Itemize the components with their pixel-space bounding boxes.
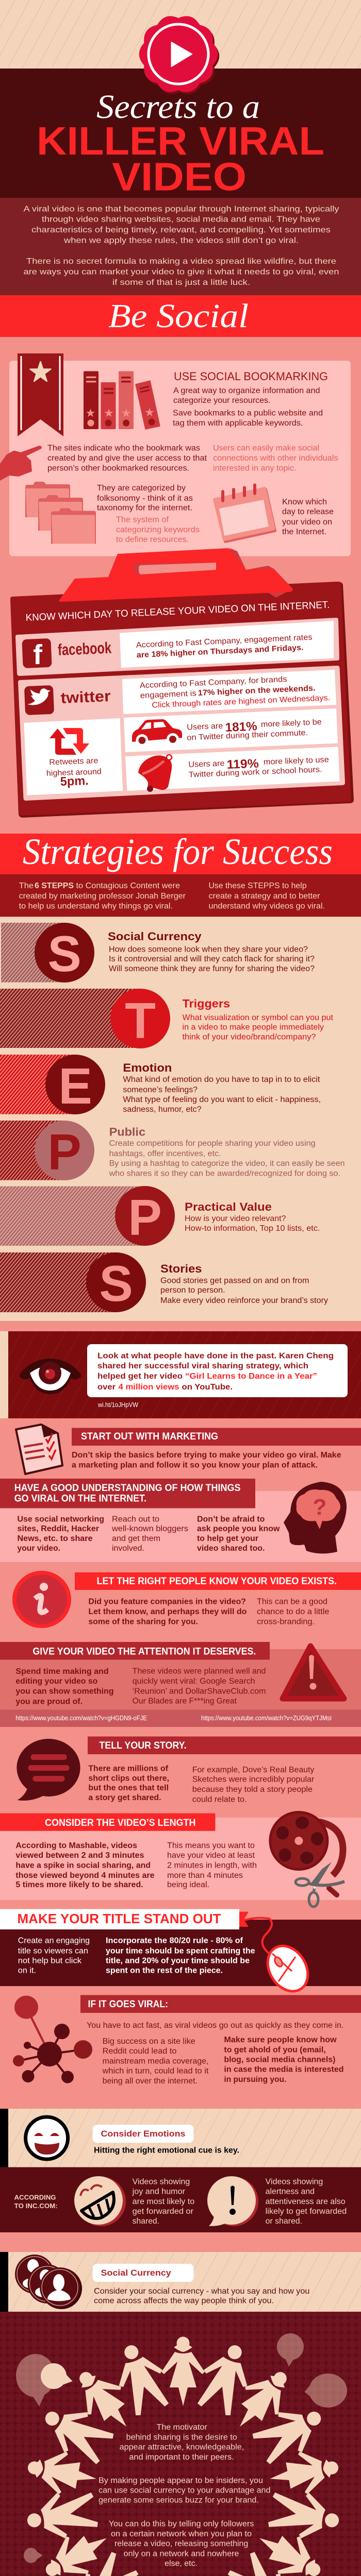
step: Social Currency: How does someone look when they share your video? [109, 945, 308, 954]
text: callout: over [97, 1383, 116, 1392]
text: twitter engagement [139, 675, 330, 710]
text: tell your story: Sketches were incredibly popular [192, 1775, 314, 1784]
step: Social Currency: Will someone think they are funny for sharing the video? [109, 964, 315, 973]
text: callout [97, 1351, 334, 1392]
text: work or school stat: 119% [226, 757, 259, 772]
panel: understanding how things go viral: GO VIRAL ON THE INTERNET. [14, 1494, 146, 1504]
icon: pointing hand [0, 446, 42, 481]
text: tell your story [88, 1764, 315, 1804]
banner: start out with marketing: START OUT WITH MARKETING [81, 1431, 218, 1442]
panel: STEPPS intro: created by marketing professor Jonah Berger [19, 892, 186, 901]
label: twitter: twitter [60, 688, 111, 707]
text: length body: have your video at least [167, 1851, 255, 1860]
text: system of categorizing: The system of [116, 515, 169, 524]
icon: clipboard handle [59, 548, 293, 602]
step: Triggers: in a video to make people immediately [183, 1023, 324, 1031]
text: if it goes viral: in pursuing you. [224, 2075, 286, 2084]
text: tell your story: because they told a story people [192, 1785, 313, 1794]
panel: give your video attention: GIVE YOUR VIDEO THE ATTENTION IT DESERVES. [32, 1646, 256, 1657]
text: commute stat: Users are [187, 722, 223, 732]
icon: facebook [22, 638, 52, 670]
text: facebook stats: According to Fast Company, engagement rates [136, 633, 313, 650]
text: length body: have a spike in social sharing, and [15, 1861, 151, 1870]
text: alertness [266, 2178, 347, 2226]
panel: be social background [0, 337, 361, 834]
text: folksonomy: They are categorized by [97, 484, 186, 493]
text: commute stat: on Twitter during their commute. [187, 728, 308, 742]
text: motivator: else, etc. [165, 2559, 198, 2568]
text: commute stat: more likely to be [260, 718, 322, 729]
text: companies: cross-branding. [257, 1617, 315, 1626]
text: title body: not help but click [18, 1957, 81, 1965]
panel: social currency: come across affects the way people think of you. [94, 2296, 274, 2305]
step: Public [0, 1121, 345, 1180]
step: Practical Value: How-to information, Top 10 lists, etc. [185, 1224, 320, 1233]
text: twitter engagement: engagement is [140, 689, 196, 700]
panel: social bookmarking [9, 361, 351, 556]
text: motivator: can use social currency to your advantage and [99, 2486, 270, 2495]
panel: Karen Cheng callout [0, 1331, 361, 1418]
panel: STEPPS intro: to Contagious Content were [76, 882, 180, 890]
text: system of categorizing: to define resources. [116, 535, 189, 544]
panel: intro: characteristics of being timely, relevant, and compelling. Yet sometimes [31, 226, 331, 234]
icon: books [84, 371, 160, 429]
text: three tips: Reach out to [112, 1515, 159, 1524]
banner: tell your story: TELL YOUR STORY. [99, 1740, 187, 1751]
step: Emotion: someone’s feelings? [123, 1086, 198, 1094]
text: three tips: your video. [18, 1544, 60, 1553]
panel: STEPPS intro [0, 874, 361, 917]
step: Public: P [47, 1124, 81, 1180]
text: callout: Look at what people have done in the past. Karen Cheng [97, 1351, 334, 1360]
text: length body: more than 4 minutes [167, 1871, 243, 1880]
text: companies: This can be a good [257, 1597, 327, 1606]
text: know which day: your video on [282, 518, 332, 527]
links [15, 1714, 332, 1722]
text: title body: spent on the rest of the piece. [106, 1967, 223, 1975]
text: marketing plan: Don’t skip the basics before trying to make your video go viral. Make [72, 1451, 341, 1460]
label: according to inc.com: ACCORDING [14, 2194, 56, 2201]
title: VIDEO [112, 155, 247, 199]
text: title body: your time should be spent crafting the [106, 1946, 255, 1956]
panel: consider emotions: Consider Emotions [101, 2129, 186, 2139]
panel: salmon lower background [0, 1321, 361, 2109]
text: length body: 2 minutes in length, with [167, 1861, 257, 1870]
text: if it goes viral: Make sure people know how [224, 2036, 337, 2044]
text: tell your story: short clips out there, [88, 1774, 169, 1783]
text: facebook stats: are 18% higher on Thursdays and Fridays. [136, 643, 304, 659]
icon: smiley [26, 2117, 68, 2159]
text: sites indicate [47, 444, 207, 473]
text: title body: Create an engaging [18, 1937, 90, 1945]
text: tell your story: a story get shared. [88, 1793, 161, 1802]
step: Stories [0, 1252, 328, 1312]
step: Public: who shares it so they can be awarded/recognized for doing so. [109, 1169, 340, 1178]
icon: retweet [50, 728, 89, 755]
text: folksonomy: folksonomy - think of it as [97, 494, 193, 503]
text: callout: shared her successful viral sharing strategy, which [97, 1362, 308, 1370]
translucent speech bubbles [12, 2333, 347, 2576]
panel: give your video attention [0, 1642, 361, 1727]
step: Triggers: What visualization or symbol can you put [183, 1013, 334, 1022]
text: alertness: or shared. [266, 2217, 302, 2226]
text: motivator [99, 2423, 270, 2568]
text: retweets [46, 756, 102, 789]
panel: intro: if some of that is just a little luck. [112, 278, 250, 287]
text: tell your story: but the ones that tell [88, 1784, 169, 1792]
text: if it goes viral: You have to act fast, as viral videos go out as quickly as they come in. [87, 2021, 343, 2030]
text: commute stat: 181% [225, 719, 257, 735]
text: length body [15, 1841, 257, 1889]
text: motivator: behind sharing is the desire to [126, 2433, 237, 2442]
text: if it goes viral [87, 2021, 343, 2086]
text: motivator: You can do this by telling only followers [109, 2519, 254, 2528]
text: folksonomy: taxonomy for the internet. [97, 504, 192, 512]
heading: Be Social: Be Social [108, 297, 249, 335]
step: Public: Public [109, 1126, 145, 1139]
text: attention body: These videos were planned well and [133, 1667, 266, 1675]
text: length body: being ideal. [167, 1880, 209, 1889]
heading: know which day: KNOW WHICH DAY TO RELEASE YOUR VIDEO ON THE INTERNET. [25, 600, 330, 623]
panel: video length [0, 1814, 361, 1900]
icon: head with brain: ? [313, 1495, 326, 1520]
icon: checklist [16, 1425, 62, 1474]
panel: STEPPS background [0, 917, 361, 1321]
text: title body: title, and 20% of your time should be [106, 1957, 250, 1965]
panel: make your title stand out: MAKE YOUR TITLE STAND OUT [18, 1911, 221, 1926]
text: twitter engagement: According to Fast Company, for brands [139, 675, 287, 690]
text: system of categorizing: categorizing keywords [116, 526, 200, 534]
text: three tips: Use social networking [18, 1515, 104, 1524]
text: attention body: Our Blades are F***ing Great [133, 1697, 237, 1705]
icon: bookmark ribbon [18, 353, 63, 436]
step: Practical Value [0, 1186, 320, 1246]
text: if it goes viral: Reddit could lead to [103, 2047, 176, 2056]
text: know which day: day to release [282, 507, 334, 516]
panel: STEPPS intro: Use these STEPPS to help [208, 882, 306, 890]
icon: speech bubble [17, 1739, 80, 1801]
icon: profile coins [15, 2255, 82, 2309]
panel: video length: CONSIDER THE VIDEO’S LENGTH [45, 1818, 196, 1828]
text: callout: “Girl Learns to Dance in a Year” [185, 1372, 317, 1381]
speech bubbles [41, 2363, 338, 2576]
text: social connections: connections with other individuals [213, 454, 338, 463]
text: companies: some of the sharing for you. [88, 1617, 198, 1626]
text: motivator: release a video, releasing something [114, 2539, 248, 2548]
text: motivator: on a certain network when you plan to [111, 2530, 252, 2538]
text: use social bookmarking: tag them with applicable keywords. [173, 419, 303, 428]
text: know which day: Know which [282, 498, 327, 506]
text: joy and humor: Videos showing [133, 2178, 190, 2187]
panel: emotions stats [0, 2167, 361, 2232]
text: use social bookmarking: USE SOCIAL BOOKMARKING [174, 370, 328, 383]
text: work or school stat [188, 755, 329, 779]
text: companies: chance to do a little [257, 1607, 329, 1616]
panel: intro [0, 198, 361, 295]
title [37, 88, 324, 199]
step: Practical Value: How is your video relevant? [185, 1214, 286, 1223]
step: Stories: person to person. [160, 1286, 225, 1295]
text: if it goes viral: being all over the internet. [103, 2077, 198, 2086]
step: Emotion [0, 1055, 321, 1114]
text: companies: Did you feature companies in the video? [88, 1597, 246, 1606]
text: length body: This means you want to [167, 1841, 255, 1850]
text: motivator: appear attractive, knowledgeable, [120, 2443, 244, 2452]
text: three tips: video shared too. [197, 1544, 265, 1553]
text: sites indicate: The sites indicate who the bookmark was [47, 444, 200, 452]
text: title body: Incorporate the 80/20 rule - 80% of [106, 1937, 243, 1945]
panel: make your title stand out [0, 1909, 361, 1998]
text: if it goes viral: mainstream media coverage, [103, 2057, 208, 2065]
text: use social bookmarking [173, 370, 328, 428]
icon: warning triangle [283, 1646, 344, 1699]
text: attention body: you are proud of. [15, 1697, 83, 1706]
step: Public: Create competitions for people sharing your video using [109, 1139, 316, 1148]
step: Social Currency: S [47, 925, 81, 982]
text: alertness: attentiveness are also [266, 2197, 346, 2206]
step: Emotion: What kind of emotion do you have to tap in to to elicit [123, 1075, 320, 1084]
text: commute stat [187, 718, 322, 742]
links: https://www.youtube.com/watch?v=gHGDN9-oFJE [15, 1714, 147, 1722]
background: top band [0, 0, 361, 69]
text: if it goes viral: in case the media is interested [224, 2065, 343, 2074]
panel: tablet board with release day stats [10, 548, 354, 818]
text: joy and humor: shared. [133, 2217, 159, 2226]
text: know which day [282, 498, 334, 536]
text: length body: those viewed beyond 4 minutes are [15, 1871, 155, 1880]
text: work or school stat: Twitter during work or school hours. [188, 765, 322, 779]
text: length body: According to Mashable, videos [15, 1841, 137, 1850]
icon: mouse [244, 1918, 316, 1998]
text: tell your story: For example, Dove’s Real Beauty [192, 1766, 315, 1774]
text: retweets: Retweets are [49, 756, 99, 767]
text: length body: viewed between 2 and 3 minutes [15, 1851, 144, 1860]
icon: alert bubble [207, 2176, 258, 2226]
text: social connections [213, 444, 338, 473]
icon: twitter [24, 685, 54, 715]
text: use social bookmarking: A great way to organize information and [173, 386, 320, 395]
links: https://www.youtube.com/watch?v=ZUG9qYTJMsI [201, 1714, 332, 1722]
text: three tips [18, 1515, 280, 1553]
text: attention body: ‘Reunion’ and DollarShaveClub.com [133, 1687, 266, 1696]
text: motivator: and important to their peers. [129, 2453, 234, 2462]
text: retweets: 5pm. [60, 774, 89, 789]
text: three tips: ask people you know [197, 1524, 280, 1533]
text: work or school stat: more likely to use [264, 755, 329, 767]
text: callout: on YouTube. [182, 1383, 233, 1392]
text: use social bookmarking: Save bookmarks to a public website and [173, 409, 323, 417]
text: motivator: only on a network and nowhere [124, 2550, 239, 2558]
step: Emotion: What type of feeling do you want to elicit - happiness, [123, 1095, 321, 1104]
text: attention body: editing your video so [15, 1677, 97, 1686]
text: length body: 5 times more likely to be shared. [15, 1880, 143, 1889]
title: KILLER VIRAL [37, 119, 324, 163]
text: joy and humor: joy and humor [132, 2187, 185, 2196]
icon: wax seal play button [139, 16, 219, 94]
panel: STEPPS intro: understand why videos go viral. [208, 902, 325, 911]
text: if it goes viral: which in turn, could lead to it [102, 2067, 209, 2075]
text: attention body: you can show something [15, 1687, 114, 1696]
step: Stories: Good stories get passed on and on from [160, 1277, 309, 1285]
text: three tips: Don’t be afraid to [197, 1515, 265, 1524]
text: alertness: likely to get forwarded [266, 2207, 347, 2216]
panel: facebook [15, 618, 339, 676]
text: three tips: to help get your [197, 1534, 258, 1543]
text: alertness: Videos showing [266, 2178, 323, 2187]
text: title body [18, 1937, 255, 1975]
text: attention body: Spend time making and [15, 1667, 109, 1676]
step: Stories: Stories [160, 1262, 202, 1275]
step: Triggers: T [125, 992, 156, 1049]
icon: network [13, 1996, 92, 2083]
step: Stories: Make every video reinforce your brand’s story [160, 1296, 328, 1305]
heading: Strategies for Success: Strategies for Success [23, 831, 333, 872]
text: tell your story: could relate to. [192, 1795, 247, 1804]
title: Secrets to a [96, 88, 260, 126]
icon: head with brain [284, 1482, 347, 1554]
text: sites indicate: created by and give the user access to that [47, 454, 207, 463]
text: work or school stat: Users are [188, 759, 225, 769]
panel: intro: when we apply these rules, the videos still don’t go viral. [63, 236, 299, 245]
panel: social currency: Social Currency [101, 2268, 171, 2278]
icon: eye [20, 1359, 81, 1394]
step: Practical Value: P [128, 1189, 162, 1246]
text: title body: title so viewers can [18, 1946, 88, 1956]
icon: calendar [215, 485, 275, 541]
step: Emotion: E [58, 1058, 92, 1114]
icon: folders [25, 482, 96, 544]
icon: facebook: f [33, 639, 43, 670]
text: twitter engagement: 17% higher on the weekends. [198, 684, 316, 698]
people figures [23, 2336, 343, 2576]
text: joy and humor: get forwarded or [133, 2207, 193, 2216]
banner: if it goes viral [80, 1995, 361, 2013]
text: callout: 4 million views [119, 1383, 179, 1392]
banner: if it goes viral: IF IT GOES VIRAL: [88, 1999, 168, 2010]
step: Triggers [0, 989, 334, 1049]
banner: tell your story [88, 1736, 361, 1754]
icon: film reel and scissors [269, 1811, 344, 1907]
text: joy and humor: are most likely to [133, 2197, 194, 2206]
icon: info [12, 1571, 71, 1628]
text: marketing plan: a marketing plan and follow it so you know your plan of attack. [72, 1461, 318, 1469]
text: marketing plan [72, 1451, 341, 1469]
panel: consider emotions: Hitting the right emotional cue is key. [94, 2146, 239, 2155]
text: three tips: News, etc. to share [18, 1534, 93, 1543]
icon: laughing face [74, 2176, 126, 2226]
icon: bell [138, 755, 172, 792]
label: according to inc.com [14, 2194, 58, 2210]
icon: car [132, 719, 182, 747]
panel: intro: are ways you can market your video to give it what it needs to go viral, even [24, 268, 339, 276]
panel: STEPPS intro: The [19, 882, 34, 890]
text: system of categorizing [116, 515, 200, 544]
text: motivator: By making people appear to be insiders, you [99, 2476, 263, 2485]
text: companies: Let them know, and perhaps they will do [88, 1607, 247, 1616]
link: wi.ht/1oJHpVW [97, 1401, 139, 1409]
text: alertness: alertness and [266, 2187, 315, 2196]
heading: Be Social [0, 295, 361, 337]
text: retweets: highest around [46, 767, 102, 778]
panel: understanding how things go viral [0, 1479, 361, 1562]
panel: social currency: Consider your social currency - what you say and how you [94, 2287, 309, 2296]
label: according to inc.com: TO INC.COM: [14, 2202, 58, 2210]
text: if it goes viral: blog, social media channels) [224, 2055, 335, 2064]
text: tell your story: There are millions of [88, 1764, 169, 1773]
text: motivator: The motivator [157, 2423, 207, 2432]
text: facebook stats [136, 633, 313, 659]
text: companies [88, 1597, 329, 1626]
text: use social bookmarking: categorize your resources. [173, 396, 270, 405]
panel: consider emotions [0, 2109, 361, 2167]
panel: circle of people [0, 2312, 361, 2576]
text: know which day: the Internet. [282, 528, 326, 536]
step: Stories: S [99, 1255, 133, 1312]
text: attention body: quickly went viral: Google Search [133, 1677, 255, 1686]
text: if it goes viral: to get ahold of you (email, [224, 2046, 326, 2055]
panel: intro: There is no secret formula to making a video spread like wildfire, but there [26, 257, 336, 266]
text: attention body [15, 1667, 266, 1706]
text: social connections: Users can easily make social [213, 444, 319, 452]
text: social connections: interested in any topic. [213, 464, 296, 473]
banner: start out with marketing [72, 1428, 361, 1446]
background: title band [0, 69, 361, 198]
panel: twitter [18, 666, 345, 801]
text: three tips: sites, Reddit, Hacker [18, 1524, 99, 1533]
step: Social Currency: Social Currency [108, 930, 202, 943]
step: Emotion: sadness, humor, etc? [123, 1105, 202, 1114]
text: twitter engagement: Click through rates are highest on Wednesdays. [152, 693, 330, 710]
step: Practical Value: Practical Value [185, 1200, 272, 1213]
label: facebook: facebook [57, 639, 112, 659]
panel: social currency [0, 2252, 361, 2312]
panel: understanding how things go viral: HAVE A GOOD UNDERSTANDING OF HOW THINGS [14, 1483, 240, 1494]
text: motivator: generate some serious buzz for your brand. [99, 2496, 259, 2504]
text: three tips: well-known bloggers [111, 1524, 188, 1533]
text: folksonomy [97, 484, 193, 512]
text: title body: on it. [18, 1967, 36, 1975]
text: if it goes viral: Big success on a site like [103, 2037, 195, 2046]
text: joy and humor [132, 2178, 194, 2226]
banner: let the right people know: LET THE RIGHT PEOPLE KNOW YOUR VIDEO EXISTS. [97, 1576, 337, 1587]
text: three tips: and get them [112, 1534, 160, 1543]
step: Triggers: Triggers [183, 997, 230, 1010]
step: Public: hashtags, offer incentives, etc. [109, 1149, 221, 1158]
panel: STEPPS intro: create a strategy and to better [208, 892, 320, 901]
text: sites indicate: person’s other bookmarked resources. [47, 464, 189, 473]
banner: let the right people know [75, 1572, 361, 1590]
text: callout: helped get her video [97, 1372, 183, 1381]
text: three tips: involved. [112, 1544, 144, 1553]
step: Social Currency: Is it controversial and will they catch flack for sharing it? [109, 955, 315, 963]
step: Emotion: Emotion [123, 1061, 172, 1074]
panel: STEPPS intro: to help us understand why things go viral. [19, 902, 173, 911]
panel: intro: through video sharing websites, social media and email. They have [42, 215, 320, 224]
step: Public: By using a hashtag to categorize the video, it can easily be seen [109, 1159, 345, 1168]
step: Social Currency [1, 923, 315, 982]
panel: intro: A viral video is one that becomes popular through Internet sharing, typically [24, 205, 339, 213]
step: Triggers: think of your video/brand/company? [183, 1032, 316, 1042]
panel: STEPPS intro: 6 STEPPS [35, 882, 74, 890]
